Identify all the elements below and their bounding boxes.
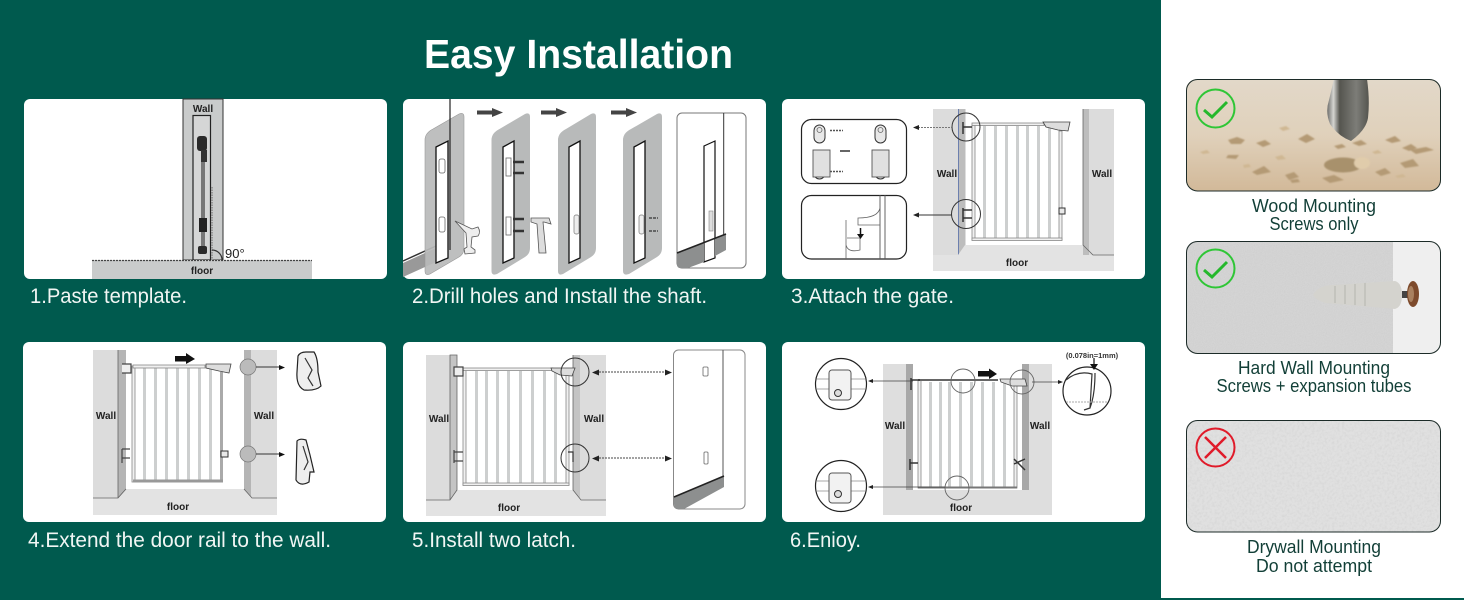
title: Easy Installation bbox=[424, 31, 733, 77]
walls and floor: Wall bbox=[1092, 169, 1112, 180]
label: wood mounting: Screws only bbox=[1270, 214, 1358, 234]
icon: green check wood bbox=[1196, 90, 1234, 128]
black direction arrow bbox=[175, 353, 195, 364]
walls and floor: Wall bbox=[254, 411, 274, 422]
floor: floor bbox=[191, 266, 213, 277]
caption 3: 3.Attach the gate. bbox=[791, 285, 954, 308]
template sheet 4 bbox=[623, 113, 662, 275]
caption 6: 6.Enioy. bbox=[790, 529, 861, 552]
walls and floor: Wall bbox=[885, 421, 905, 432]
label: drywall mounting bbox=[1247, 537, 1381, 576]
panel: step 4 extend rail bbox=[23, 342, 386, 522]
detail circles bbox=[952, 113, 980, 228]
walls and floor: floor bbox=[167, 502, 189, 513]
panel: wall types bbox=[1161, 0, 1464, 598]
small detail circles bbox=[945, 369, 1034, 500]
walls and floor: floor bbox=[498, 503, 520, 514]
inset top: hinge parts bbox=[802, 120, 906, 184]
floor bbox=[92, 260, 312, 279]
baseboard left bbox=[403, 248, 436, 277]
label: hard wall mounting: Screws + expansion tubes bbox=[1216, 376, 1412, 396]
gate bbox=[454, 367, 575, 486]
right detail circle with gap note: (0.078in=1mm) bbox=[1066, 351, 1119, 360]
connector arrows bbox=[913, 125, 952, 218]
walls and floor: Wall bbox=[429, 414, 449, 425]
double arrows bbox=[592, 370, 672, 462]
gate bbox=[910, 378, 1027, 488]
90 degree mark bbox=[212, 246, 245, 261]
arrow 3 bbox=[611, 108, 637, 117]
caption 4: 4.Extend the door rail to the wall. bbox=[28, 529, 331, 552]
template sheet 2 bbox=[492, 113, 530, 275]
icon: red cross bbox=[1196, 428, 1234, 466]
90 degree mark: 90° bbox=[225, 246, 245, 261]
arrow 1 bbox=[477, 108, 503, 117]
left detail circle top bbox=[816, 358, 866, 410]
wall with template bbox=[183, 99, 223, 260]
label: drywall mounting: Drywall Mounting bbox=[1247, 537, 1381, 557]
card: wood mounting photo bbox=[1186, 79, 1441, 191]
panel: step 1 paste template bbox=[24, 99, 387, 279]
walls and floor: Wall bbox=[937, 169, 957, 180]
walls and floor bbox=[426, 355, 606, 516]
template sheet 3 bbox=[558, 113, 596, 275]
icon: green check hard wall bbox=[1196, 250, 1234, 288]
left detail circle bottom bbox=[816, 460, 866, 512]
walls and floor: floor bbox=[950, 503, 972, 514]
walls and floor: Wall bbox=[1030, 421, 1050, 432]
walls and floor: Wall bbox=[584, 414, 604, 425]
template sheet 1 bbox=[425, 99, 464, 275]
walls and floor bbox=[883, 364, 1052, 515]
walls and floor: floor bbox=[1006, 258, 1028, 269]
right detail circle with gap note bbox=[1063, 351, 1119, 415]
label: wood mounting bbox=[1252, 196, 1376, 234]
wall with template: Wall bbox=[193, 104, 213, 115]
panel: step 5 install latch bbox=[403, 342, 766, 522]
detail circles bbox=[561, 358, 589, 472]
card: hard wall photo bbox=[1186, 241, 1441, 354]
gate bbox=[972, 122, 1070, 240]
card: drywall photo bbox=[1186, 420, 1441, 532]
connector arrows bbox=[868, 379, 1063, 489]
caption 2: 2.Drill holes and Install the shaft. bbox=[412, 285, 707, 308]
arrow 2 bbox=[541, 108, 567, 117]
detail circles and latches bbox=[240, 352, 321, 484]
panel: step 6 enjoy bbox=[782, 342, 1145, 522]
walls and floor: Wall bbox=[96, 411, 116, 422]
drill icon bbox=[455, 221, 480, 254]
finished wall inset bbox=[677, 113, 746, 268]
walls and floor bbox=[933, 109, 1114, 271]
walls and floor bbox=[93, 350, 277, 515]
caption 5: 5.Install two latch. bbox=[412, 529, 576, 552]
label: drywall mounting: Do not attempt bbox=[1256, 556, 1372, 576]
gate bbox=[122, 364, 231, 482]
black direction arrow bbox=[978, 368, 997, 379]
label: hard wall mounting: Hard Wall Mounting bbox=[1238, 358, 1390, 378]
caption 1: 1.Paste template. bbox=[30, 285, 187, 308]
template inset bbox=[674, 350, 745, 509]
panel: step 2 drill holes bbox=[403, 99, 766, 279]
label: hard wall mounting bbox=[1216, 358, 1412, 396]
panel: step 3 attach gate bbox=[782, 99, 1145, 279]
hammer icon bbox=[531, 218, 551, 253]
inset bottom: bracket bbox=[802, 195, 906, 259]
label: wood mounting: Wood Mounting bbox=[1252, 196, 1376, 216]
